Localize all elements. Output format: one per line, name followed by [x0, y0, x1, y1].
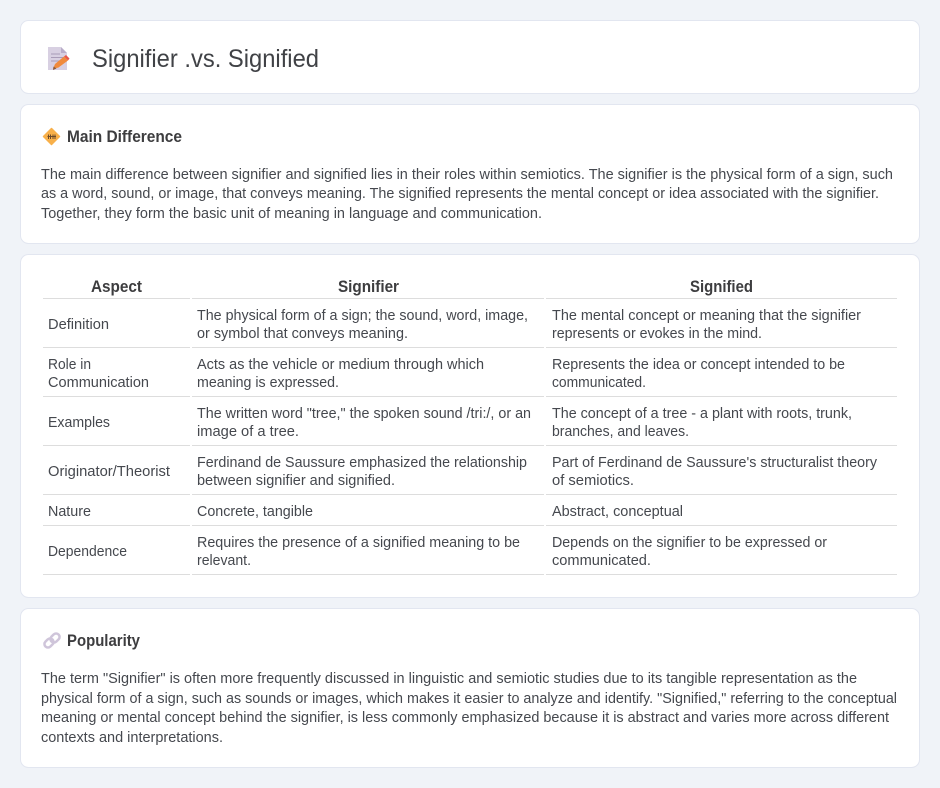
table header: Signified [690, 278, 753, 296]
row: role in communication: Role in [48, 357, 91, 373]
text block: popularity: The term "Signifier" is often more frequently discussed in linguistic and semiotic studies due to its tangible representation as the [41, 671, 857, 687]
text block: popularity: contexts and interpretations. [41, 730, 223, 746]
panel: main difference [20, 104, 920, 244]
row: definition: Definition [48, 317, 109, 333]
row: examples: The concept of a tree - a plant with roots, trunk, [552, 406, 852, 422]
row: examples: branches, and leaves. [552, 424, 689, 440]
text block: popularity: meaning or mental concept behind the signifier, is less commonly emphasized because it is abstract and varies more across different [41, 710, 889, 726]
row: definition: or symbol that conveys meaning. [197, 326, 408, 342]
heading: main difference: Main Difference [67, 128, 182, 146]
heading: popularity: Popularity [67, 632, 141, 650]
row: examples: The written word "tree," the spoken sound /tri:/, or an [197, 406, 531, 422]
text block: main difference: as a word, sound, or image, that conveys meaning. The signified represents the mental concept or idea associated with the signifier. [41, 186, 879, 202]
row: role in communication [48, 357, 845, 391]
table header: Aspect [91, 278, 143, 296]
text block: main difference: The main difference between signifier and signified lies in their roles within semiotics. The signifier is the physical form of a sign, such [41, 167, 893, 183]
row: nature: Nature [48, 504, 91, 520]
icon: chain link [43, 632, 61, 649]
row: role in communication: Acts as the vehicle or medium through which [197, 357, 484, 373]
row: examples [48, 406, 852, 440]
row: originator/theorist: Part of Ferdinand de Saussure's structuralist theory [552, 455, 878, 471]
row: definition: represents or evokes in the mind. [552, 326, 762, 342]
row: dependence [48, 535, 827, 569]
row: originator/theorist: Ferdinand de Saussure emphasized the relationship [197, 455, 527, 471]
row: nature: Concrete, tangible [197, 504, 313, 520]
row: definition: The physical form of a sign; the sound, word, image, [197, 308, 528, 324]
text block: main difference: Together, they form the basic unit of meaning in language and communication. [41, 206, 542, 222]
title: Signifier .vs. Signified [92, 46, 319, 73]
text block: popularity [41, 671, 897, 746]
text block: popularity: physical form of a sign, such as sounds or images, which makes it easier to analyze and identify. "Signified," referring to the conceptual [41, 691, 897, 707]
icon: document with pencil [48, 47, 70, 70]
table header: Signifier [338, 278, 400, 296]
row: dependence: communicated. [552, 553, 651, 569]
panel: popularity [20, 608, 920, 768]
row: role in communication: meaning is expressed. [197, 375, 339, 391]
panel: comparison table [20, 254, 920, 598]
row: role in communication: Communication [48, 375, 149, 391]
row: originator/theorist: between signifier and signified. [197, 473, 395, 489]
row: originator/theorist [48, 455, 878, 489]
table header [91, 278, 753, 296]
row: nature: Abstract, conceptual [552, 504, 683, 520]
panel: title header [20, 20, 920, 94]
row: originator/theorist: Originator/Theorist [48, 464, 170, 480]
row: dependence: Dependence [48, 544, 127, 560]
row: role in communication: communicated. [552, 375, 646, 391]
icon: warning diamond [44, 128, 60, 144]
row: examples: Examples [48, 415, 110, 431]
row: dependence: Depends on the signifier to be expressed or [552, 535, 827, 551]
row: dependence: relevant. [197, 553, 251, 569]
row: examples: image of a tree. [197, 424, 299, 440]
row: role in communication: Represents the idea or concept intended to be [552, 357, 845, 373]
text block: main difference [41, 167, 893, 222]
row: originator/theorist: of semiotics. [552, 473, 634, 489]
row: definition: The mental concept or meaning that the signifier [552, 308, 861, 324]
row: definition [48, 308, 861, 342]
row: dependence: Requires the presence of a signified meaning to be [197, 535, 520, 551]
row: nature [48, 504, 683, 520]
